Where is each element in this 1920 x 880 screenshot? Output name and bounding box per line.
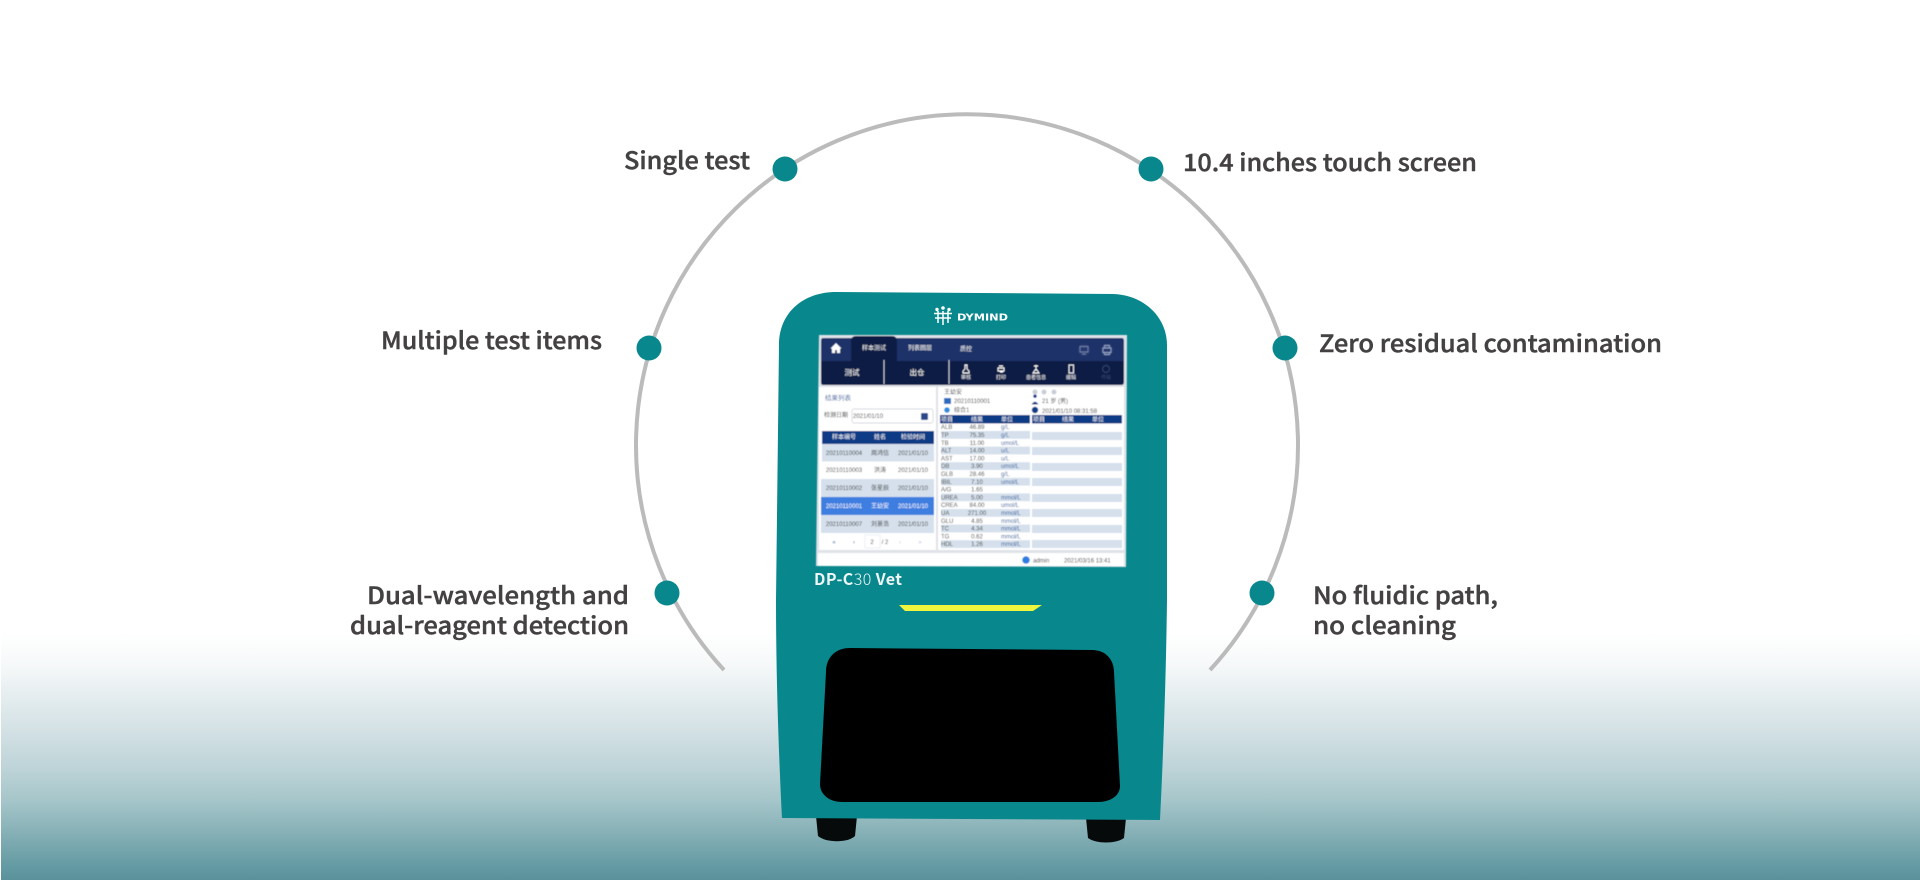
results table left: AST [941,456,953,462]
results table left: TP [941,433,949,439]
feature: zero residual contamination: Zero residual contamination [1319,324,1662,359]
results table left [940,415,1030,548]
list table: 周鸿信 [871,449,889,457]
results table left: 项目 [941,416,953,424]
results table left: GLB [941,472,953,478]
screen toolbar: 审核 [961,374,971,381]
screen toolbar: 传输 [1101,374,1111,381]
brand logo [934,307,1008,325]
list table: 2021/01/10 [898,451,929,457]
pager: / 2 [882,540,889,546]
results table left: umol/L [1001,480,1020,486]
screen toolbar [821,360,1124,385]
indicator light [899,605,1042,611]
status bar: admin [1033,558,1049,564]
screen nav bar: 质控 [960,345,972,353]
results table left: TC [941,526,950,532]
feature arc [636,114,1298,670]
results table left: IBIL [941,480,952,486]
results table left: UA [941,511,949,517]
results table left: A/G [941,488,952,494]
model name: DP-C30 Vet [814,566,902,590]
results table left: 结果 [971,416,983,424]
results table left: 28.46 [969,472,985,478]
feature: no fluidic path [1250,576,1498,641]
results table left: mmol/L [1001,526,1021,532]
patient info [944,388,1098,415]
results table left: umol/L [1001,503,1020,509]
patient info: 20210110001 [954,399,991,405]
list table: 王幼安 [871,502,889,510]
brand logo: DYMIND [957,312,1008,324]
list table: 张星辰 [871,484,889,492]
toolbar icons [963,365,1110,373]
list table: 2021/01/10 [898,504,929,510]
results table left: 11.00 [970,441,985,447]
list table: 20210110003 [826,468,863,474]
list table: 2021/01/10 [898,522,929,528]
active tab [851,336,897,361]
icon: home [830,343,842,353]
list table: 20210110002 [826,486,863,492]
screen toolbar: 出仓 [910,367,925,377]
pager: « [832,540,836,546]
results table left: 1.65 [971,488,983,494]
results table left: TG [941,534,950,540]
sample window [820,648,1120,802]
icon: calendar [921,413,928,420]
results table left: 17.00 [969,456,985,462]
panel: result list: 结果列表 [825,393,852,402]
results table left: 3.90 [971,464,983,470]
pager: › [899,540,901,546]
feature: no fluidic path: no cleaning [1313,606,1456,641]
list table: 20210110007 [826,522,863,528]
patient info: 王幼安 [944,388,962,396]
feature: single test [624,141,798,182]
results table left: HDL [941,542,954,548]
panel: patient results [938,387,1124,550]
results table left: mmol/L [1001,496,1021,502]
patient info: 综合1 [954,406,970,414]
results table left: mmol/L [1001,511,1021,517]
pager: ‹ [853,540,855,546]
results table left: g/L [1001,472,1010,478]
results table left: GLU [941,519,953,525]
results table left: 46.89 [969,425,985,431]
screen toolbar: 患者信息 [1026,374,1046,381]
results table left: 4.34 [971,526,983,532]
screen frame [816,335,1127,567]
results table left: 5.00 [971,496,983,502]
screen toolbar: 测试 [844,367,860,377]
results table left: CREA [941,503,958,509]
results table left: u/L [1001,448,1010,454]
list table: 20210110001 [826,504,863,510]
results table left: mmol/L [1001,534,1021,540]
feature: dual-wavelength detection: dual-reagent detection [350,606,629,641]
feature: touch screen: 10.4 inches touch screen [1183,143,1477,178]
results table left: u/L [1001,456,1010,462]
results table left: 单位 [1001,416,1013,424]
logo symbol [934,307,952,325]
screen nav bar: 样本测试 [862,344,886,352]
results table left: 75.35 [969,433,985,439]
feature: no fluidic path: No fluidic path, [1313,576,1498,611]
list table: 2021/01/10 [898,486,929,492]
results table left: DB [941,464,949,470]
results table left: mmol/L [1001,542,1021,548]
results table right: 单位 [1092,416,1104,424]
device feet [816,816,1126,842]
list table [821,431,934,533]
results table right [1032,415,1122,548]
results table left: ALT [941,448,952,454]
screen nav bar: 列表图层 [908,344,932,352]
results table left: 0.62 [971,534,983,540]
results table left: umol/L [1001,464,1020,470]
results table left: 7.10 [971,480,983,486]
results table right: 项目 [1033,416,1045,424]
feature: dual-wavelength detection: Dual-wavelength and [367,576,629,611]
list table: 20210110004 [826,451,863,457]
results table left: mmol/L [1001,519,1021,525]
screen toolbar: 编辑 [1066,374,1076,381]
results table left: 1.26 [971,542,983,548]
results table left: ALB [941,425,952,431]
pager [832,535,922,548]
status bar: 2021/03/16 13:41 [1064,558,1111,564]
results table left: g/L [1001,425,1010,431]
device body [776,292,1167,820]
pager: » [918,540,922,546]
list table: 刘景浩 [871,520,889,528]
feature: single test: Single test [624,141,751,176]
list table: 洪涛 [874,466,886,474]
results table left: umol/L [1001,441,1020,447]
analyzer device [776,292,1167,842]
results table left: 84.00 [969,503,985,509]
feature: dual-wavelength detection [350,576,680,641]
results table right: 结果 [1062,416,1074,424]
results table left: 271.00 [968,511,987,517]
status bar [818,553,1124,566]
panel: result list: 检测日期 [824,411,848,419]
list table: 姓名 [874,433,886,441]
panel: result list: 2021/01/10 [853,414,884,420]
list table: 样本编号 [832,433,856,441]
list table: 2021/01/10 [898,468,929,474]
feature: multiple test items: Multiple test items [381,321,602,356]
screen nav bar [821,336,1124,361]
list table: 检验时间 [901,433,925,441]
results table left: UREA [941,496,958,502]
results table left: TB [941,441,949,447]
screen toolbar: 打印 [996,374,1006,381]
nav icons [1078,344,1114,356]
touch screen [816,335,1127,567]
feature: multiple test items [381,321,662,360]
results table left: 14.00 [969,448,985,454]
patient info: 21 岁 (男) [1042,397,1068,405]
pager: 2 [870,540,874,546]
results table left: 4.85 [971,519,983,525]
patient info: 2021/01/10 08:31:58 [1042,409,1098,415]
panel: result list [819,387,936,550]
results table left: g/L [1001,433,1010,439]
